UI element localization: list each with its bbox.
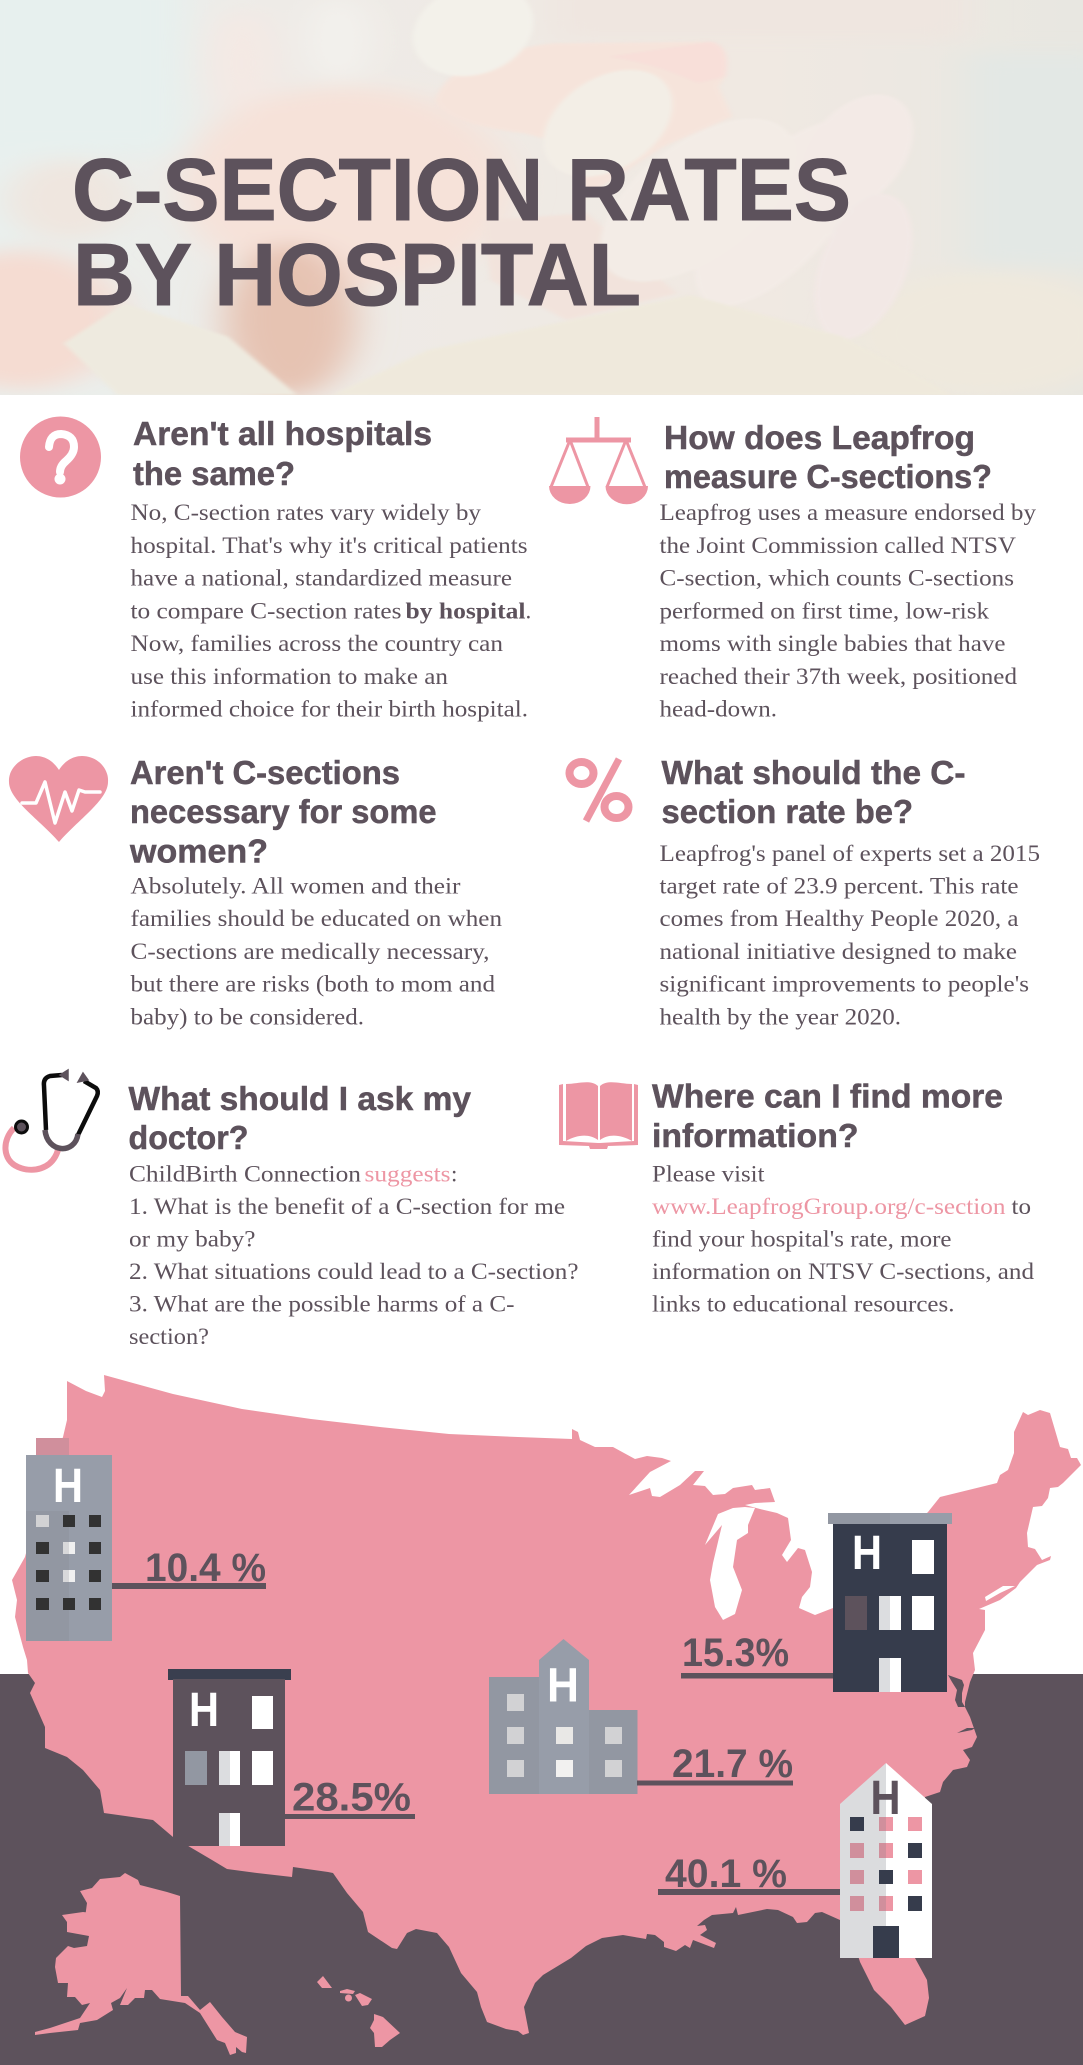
label: 40.1 percent: [658, 1852, 840, 1896]
body text: head-down.: [660, 696, 777, 722]
icon: stethoscope: [5, 1070, 98, 1170]
hospital: 15.3 percent: H: [852, 1527, 882, 1580]
body text: moms with single babies that have: [660, 631, 1006, 656]
body text: [129, 1162, 578, 1349]
body text: find your hospital's rate, more: [652, 1226, 952, 1252]
body text: to compare C-section rates: [130, 598, 402, 624]
icon: open book: [559, 1082, 638, 1149]
body text: 1. What is the benefit of a C-section for me: [129, 1194, 565, 1219]
Alaska: [35, 1873, 247, 2055]
title: C-SECTION RATES: [72, 140, 851, 239]
heading: [129, 754, 437, 870]
body text: [130, 874, 503, 1030]
body text: comes from Healthy People 2020, a: [660, 906, 1018, 931]
body text: or my baby?: [129, 1226, 256, 1252]
heading: measure C-sections?: [664, 458, 992, 495]
heading: women?: [129, 832, 268, 870]
heading: [662, 754, 966, 830]
hospital: 10.4 percent: [26, 1438, 112, 1641]
body text: Leapfrog uses a measure endorsed by: [660, 500, 1037, 525]
body text: No, C-section rates vary widely by: [130, 500, 482, 525]
map of the United States: [12, 1375, 1081, 2055]
dark footer background: [0, 1674, 1083, 2065]
heading: [664, 419, 992, 495]
heading: What should the C-: [662, 754, 966, 791]
hospital: 28.5 percent: H: [189, 1684, 219, 1737]
body text: Leapfrog's panel of experts set a 2015: [660, 841, 1040, 866]
body text: [652, 1162, 1035, 1316]
body text: :: [451, 1162, 457, 1186]
body text: health by the year 2020.: [660, 1004, 901, 1030]
body text: use this information to make an: [130, 664, 449, 689]
heading: [652, 1078, 1003, 1154]
panel: What should I ask my doctor: [5, 1070, 579, 1349]
heading: What should I ask my: [128, 1080, 472, 1117]
hero banner: [0, 0, 1083, 397]
label: 40.1 percent: 40.1 %: [665, 1852, 787, 1896]
body text: informed choice for their birth hospital.: [130, 696, 528, 722]
heading: Aren't all hospitals: [133, 415, 432, 452]
body text: Please visit: [652, 1162, 765, 1186]
panel: How does Leapfrog measure C-sections: [549, 417, 1037, 722]
body text: hospital. That's why it's critical patients: [130, 533, 528, 558]
heading: section rate be?: [662, 793, 913, 830]
panel: Aren't C-sections necessary: [9, 754, 503, 1030]
body text: reached their 37th week, positioned: [660, 664, 1018, 689]
icon: balance scales: [549, 417, 648, 504]
body text: [660, 500, 1037, 722]
body text: [130, 500, 531, 722]
body text: but there are risks (both to mom and: [130, 972, 496, 996]
body text: .: [526, 598, 531, 624]
title: BY HOSPITAL: [73, 225, 641, 324]
body text: have a national, standardized measure: [130, 566, 512, 590]
hospital: 15.3 percent: [828, 1513, 952, 1692]
heading: necessary for some: [130, 793, 436, 830]
body text: links to educational resources.: [652, 1292, 954, 1316]
Great Lakes and coastal cut-outs: [705, 1507, 755, 1620]
body text: target rate of 23.9 percent. This rate: [660, 874, 1018, 898]
hero photo: baby foot in gloved hand: [0, 0, 1083, 395]
hospital: 21.7 percent: [489, 1639, 638, 1794]
heading: Where can I find more: [652, 1078, 1003, 1114]
panel: Where can I find more information: [559, 1078, 1035, 1316]
icon: heart with pulse: [9, 756, 108, 842]
panel: Aren't all hospitals the same: [20, 415, 531, 722]
body text: to: [1012, 1194, 1031, 1219]
body text: section?: [129, 1324, 209, 1349]
label: 15.3 percent: 15.3%: [682, 1631, 789, 1675]
body text: performed on first time, low-risk: [660, 598, 990, 624]
heading: doctor?: [128, 1119, 248, 1156]
body text: significant improvements to people's: [660, 972, 1029, 996]
body text: families should be educated on when: [130, 906, 503, 931]
body text: Absolutely. All women and their: [130, 874, 461, 898]
heading: [128, 1080, 472, 1156]
hospital: 40.1 percent: H: [870, 1772, 900, 1825]
body text: national initiative designed to make: [660, 939, 1017, 964]
body text: C-sections are medically necessary,: [130, 939, 490, 964]
body text: C-section, which counts C-sections: [660, 566, 1014, 590]
heading: Aren't C-sections: [130, 754, 400, 791]
hospital: 10.4 percent: H: [53, 1460, 83, 1513]
body text: [660, 841, 1040, 1030]
hospital: 28.5 percent: [168, 1669, 291, 1846]
body text: Now, families across the country can: [130, 631, 504, 656]
body text: ChildBirth Connection: [129, 1162, 362, 1186]
icon: question mark: [20, 416, 101, 498]
body text: by hospital: [406, 598, 526, 624]
title: [72, 140, 851, 324]
heading: the same?: [133, 455, 295, 492]
body text: 2. What situations could lead to a C-section?: [129, 1259, 578, 1284]
contiguous United States: [12, 1375, 1081, 2035]
hospital: 40.1 percent: [840, 1763, 932, 1958]
body text: suggests: [364, 1162, 451, 1186]
body text: 3. What are the possible harms of a C-: [129, 1292, 514, 1316]
label: 10.4 percent: 10.4 %: [145, 1546, 266, 1590]
hospital: 21.7 percent: H: [547, 1660, 579, 1712]
heading: How does Leapfrog: [664, 419, 975, 456]
label: 15.3 percent: [681, 1631, 833, 1678]
label: 21.7 percent: 21.7 %: [672, 1742, 793, 1786]
label: 28.5 percent: 28.5%: [292, 1776, 411, 1820]
panel: What should the C-section rate be: [570, 754, 1040, 1030]
map section: [0, 1375, 1083, 2065]
icon: percent sign: [570, 759, 628, 821]
heading: [133, 415, 432, 492]
body text: baby) to be considered.: [130, 1004, 364, 1030]
body text: the Joint Commission called NTSV: [660, 533, 1016, 558]
Hawaii: [317, 1976, 400, 2047]
heading: information?: [652, 1117, 858, 1154]
body text: information on NTSV C-sections, and: [652, 1259, 1035, 1284]
body text: www.LeapfrogGroup.org/c-section: [652, 1194, 1006, 1219]
